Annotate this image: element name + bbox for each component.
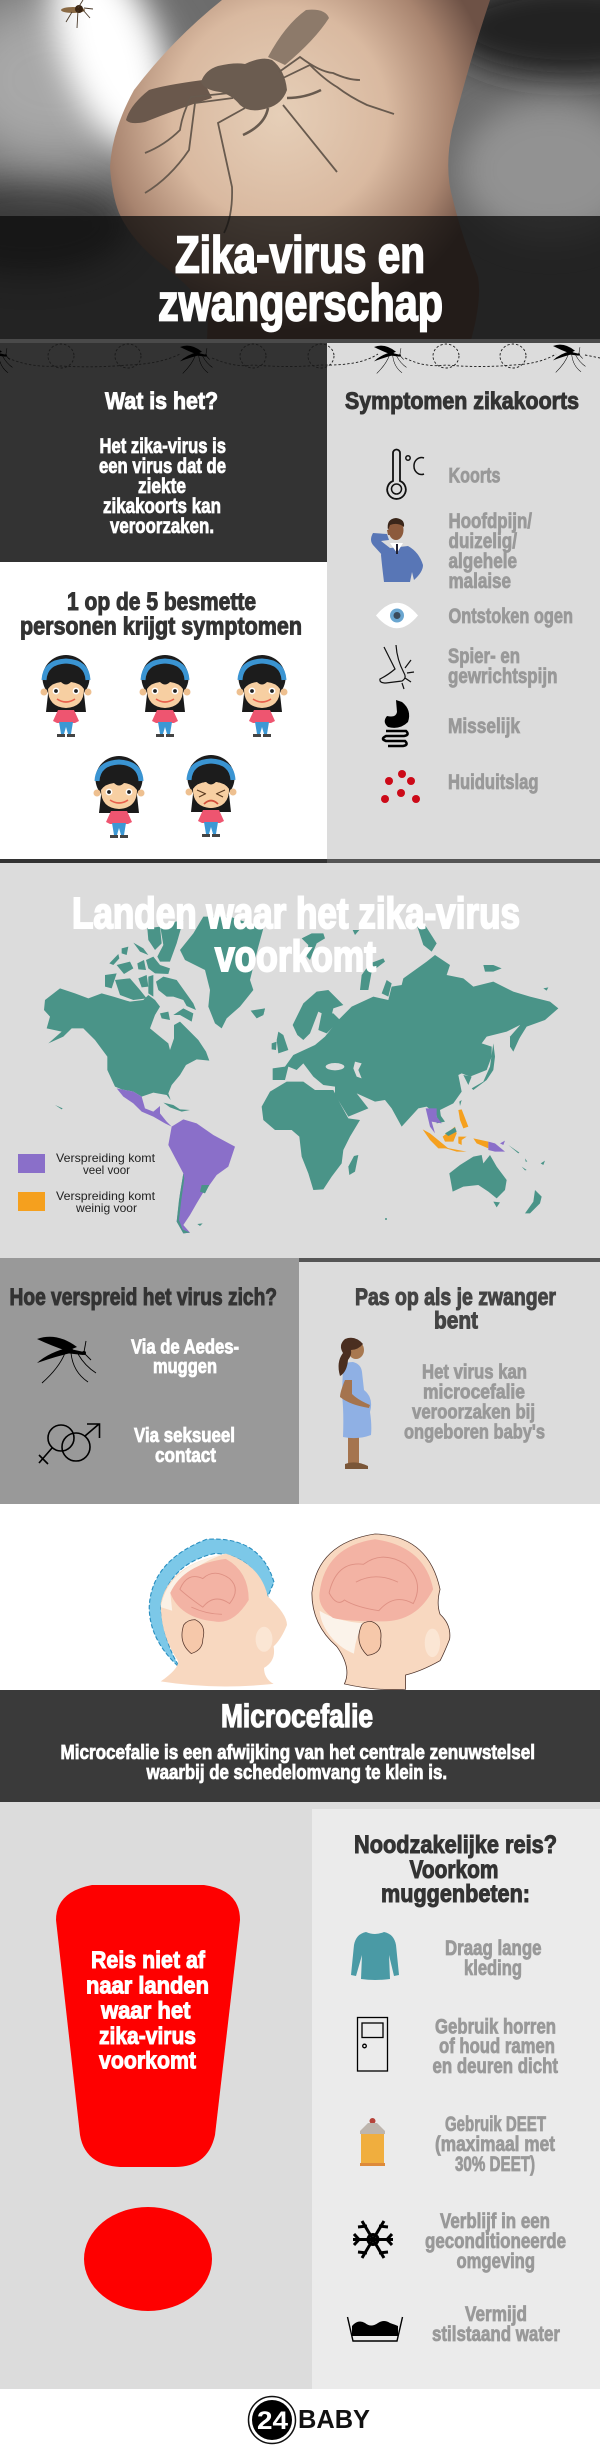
text: aedes: muggen — [153, 1356, 217, 1378]
heading: 1 op de 5: personen krijgt symptomen — [20, 612, 302, 640]
text: airco — [425, 2210, 566, 2273]
mosquito trail — [0, 344, 600, 373]
text: microcefalie definition: Microcefalie is een afwijking van het centrale zenuwstelsel — [60, 1742, 535, 1764]
text: microcefalie definition — [60, 1742, 535, 1784]
text: deet: Gebruik DEET — [445, 2113, 546, 2136]
text: aedes — [131, 1337, 239, 1378]
legend: veel voor — [83, 1163, 130, 1177]
icon: snowflake — [353, 2221, 393, 2258]
heading: wat is het: Wat is het? — [105, 388, 218, 415]
text: huiduitslag: Huiduitslag — [448, 771, 538, 794]
text: misselijk: Misselijk — [448, 715, 520, 738]
icon: thermometer — [387, 450, 424, 499]
panel: reis niet af — [0, 1802, 600, 2389]
panel: map — [0, 863, 600, 1258]
heading: microcefalie: Microcefalie — [221, 1698, 373, 1734]
text: stilstaand water: Vermijd — [465, 2303, 527, 2326]
hero photo — [0, 0, 600, 340]
text: microcefalie waarschuwing: Het virus kan — [422, 1362, 527, 1384]
text: wat is het: Het zika-virus is — [100, 435, 226, 458]
text: draag lange kleding: Draag lange — [445, 1937, 542, 1960]
mosquito shadow on belly — [126, 10, 394, 233]
text: microcefalie waarschuwing — [404, 1362, 545, 1444]
text: aedes: Via de Aedes- — [131, 1337, 239, 1359]
text: stilstaand water — [432, 2303, 560, 2346]
heading: pas op: Pas op als je zwanger — [355, 1284, 556, 1311]
text: deet — [435, 2113, 555, 2176]
legend: Verspreiding komt — [56, 1189, 156, 1203]
icon: girl 4 — [94, 756, 144, 838]
text: draag lange kleding: kleding — [464, 1957, 522, 1980]
text: microcefalie waarschuwing: microcefalie — [423, 1382, 525, 1404]
text: horren — [432, 2015, 558, 2078]
text: microcefalie definition: waarbij de schedelomvang te klein is. — [146, 1762, 447, 1784]
text: draag lange kleding — [445, 1937, 542, 1980]
text: koorts: Koorts — [448, 465, 500, 488]
icon: stomach — [383, 700, 409, 746]
pregnant belly — [110, 0, 490, 340]
text: hoofdpijn: duizelig/ — [448, 530, 517, 553]
icon: pregnant woman — [339, 1338, 371, 1469]
text: horren: of houd ramen — [439, 2035, 555, 2058]
logo: 24 baby: 24 — [257, 2407, 288, 2435]
icon: girl 1 — [40, 655, 92, 737]
text: reis niet af — [86, 1947, 209, 2075]
icon: sick girl — [186, 755, 236, 837]
heading: pas op: bent — [434, 1308, 478, 1335]
world map — [44, 917, 558, 1233]
text: wat is het: zikakoorts kan — [103, 495, 221, 518]
heading: 1 op de 5: 1 op de 5 besmette — [67, 588, 256, 616]
text: seksueel: contact — [155, 1445, 216, 1467]
icon: door — [358, 2018, 388, 2071]
text: reis niet af: naar landen — [86, 1973, 209, 2000]
icon: water basin — [348, 2317, 402, 2341]
heading: 1 op de 5 — [20, 588, 302, 640]
heading: noodzakelijke reis: muggenbeten: — [381, 1880, 530, 1908]
icon: gender symbols — [39, 1424, 100, 1464]
text: hoofdpijn: algehele — [448, 550, 517, 573]
text: microcefalie waarschuwing: veroorzaken bij — [412, 1402, 535, 1424]
panel: microcefalie — [0, 1690, 600, 1802]
text: seksueel — [134, 1425, 235, 1467]
text: airco: geconditioneerde — [425, 2230, 566, 2253]
legend — [18, 1151, 156, 1215]
heading: noodzakelijke reis: Voorkom — [410, 1856, 498, 1884]
text: airco: Verblijf in een — [440, 2210, 550, 2233]
panel: noodzakelijke reis — [312, 1809, 600, 2389]
icon: spray can — [360, 2118, 385, 2166]
text: spier: Spier- en — [448, 645, 520, 668]
panel: pas op — [299, 1258, 600, 1504]
text: reis niet af: voorkomt — [99, 2048, 196, 2075]
text: reis niet af: waar het — [100, 1998, 191, 2024]
heading: map — [72, 889, 520, 981]
logo: 24 baby — [248, 2396, 370, 2444]
legend: Verspreiding komt — [56, 1151, 156, 1165]
text: wat is het: veroorzaken. — [110, 515, 214, 538]
icon: man with headache — [371, 518, 423, 582]
heading: hoe verspreid: Hoe verspreid het virus zich? — [10, 1284, 277, 1311]
text: spier — [448, 645, 558, 688]
panel: verspreiding — [0, 1258, 299, 1504]
text: airco: omgeving — [456, 2250, 535, 2273]
text: deet: (maximaal met — [435, 2133, 555, 2156]
text: deet: 30% DEET) — [455, 2153, 535, 2176]
icon: foot — [380, 645, 414, 689]
icon: girl 2 — [140, 655, 190, 737]
icon: rash dots — [381, 770, 420, 803]
logo: 24 baby: BABY — [298, 2404, 370, 2434]
text: horren: en deuren dicht — [432, 2055, 558, 2078]
title band — [0, 216, 600, 340]
panel: microcefalie illustration — [0, 1504, 600, 1690]
text: seksueel: Via seksueel — [134, 1425, 235, 1447]
icon: girl 3 — [236, 655, 288, 737]
panel: symptomen — [327, 343, 600, 859]
title: zwangerschap — [158, 275, 443, 333]
panel: 1 op de 5 — [0, 562, 327, 859]
panel: wat is het — [0, 339, 600, 562]
text: hoofdpijn: malaise — [448, 570, 511, 593]
icon: exclamation mark — [56, 1885, 240, 2311]
illustration: baby heads — [149, 1534, 450, 1690]
text: microcefalie waarschuwing: ongeboren baby's — [404, 1422, 545, 1444]
icon: eye — [376, 603, 418, 628]
title — [158, 227, 443, 333]
text: stilstaand water: stilstaand water — [432, 2323, 560, 2346]
heading: symptomen: Symptomen zikakoorts — [345, 388, 579, 415]
small mosquito — [61, 0, 93, 28]
title: Zika-virus en — [175, 227, 425, 285]
text: reis niet af: Reis niet af — [91, 1947, 206, 1974]
text: wat is het: een virus dat de — [99, 455, 226, 478]
text: hoofdpijn — [448, 510, 532, 593]
icon: shirt — [351, 1932, 399, 1980]
heading: pas op — [355, 1284, 556, 1335]
text: reis niet af: zika-virus — [99, 2023, 196, 2050]
text: spier: gewrichtspijn — [448, 665, 558, 688]
heading: map: voorkomt — [215, 932, 376, 981]
icon: mosquito — [37, 1337, 96, 1383]
heading: noodzakelijke reis: Noodzakelijke reis? — [354, 1831, 557, 1859]
heading: noodzakelijke reis — [354, 1831, 557, 1908]
text: hoofdpijn: Hoofdpijn/ — [448, 510, 532, 533]
text: horren: Gebruik horren — [435, 2015, 556, 2038]
text: wat is het — [99, 435, 226, 538]
text: wat is het: ziekte — [138, 475, 186, 498]
panel: footer — [0, 2389, 600, 2450]
legend: weinig voor — [75, 1201, 137, 1215]
